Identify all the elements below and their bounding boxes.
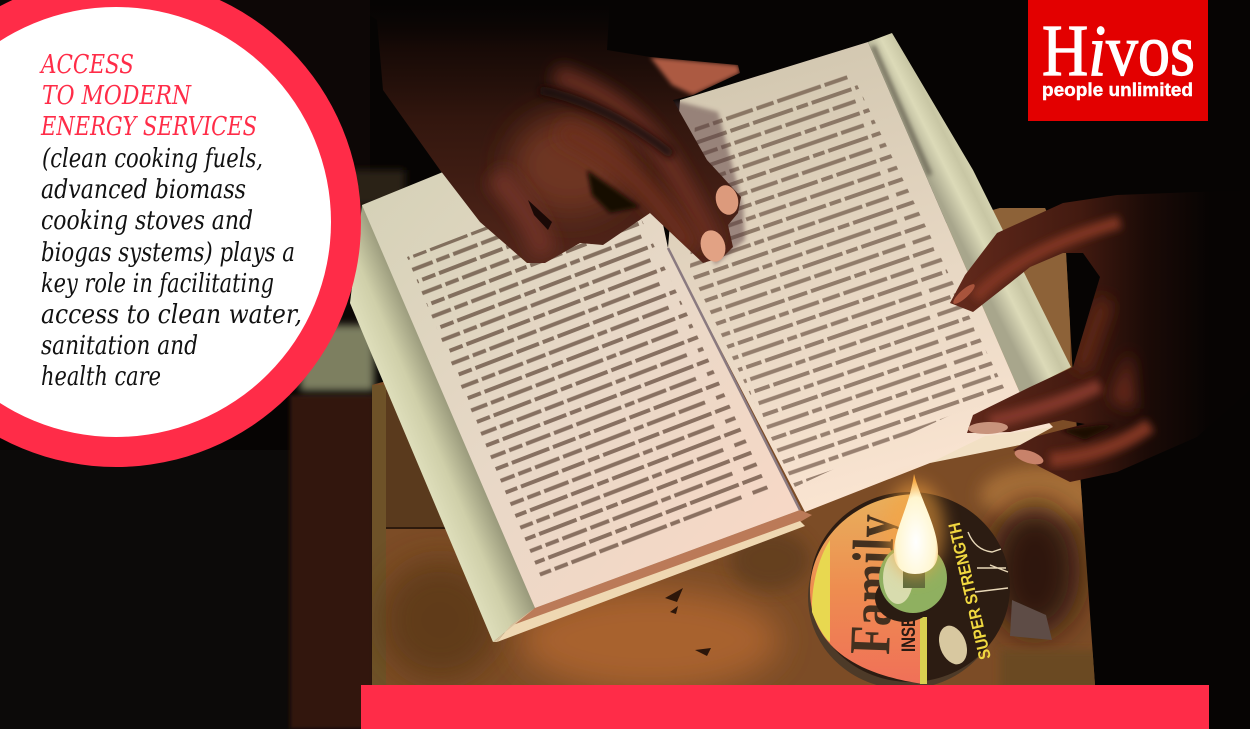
lamp emblem xyxy=(939,626,967,664)
callout heading: ENERGY SERVICES xyxy=(40,112,257,142)
callout body text: access to clean water, xyxy=(41,300,302,330)
wooden table xyxy=(372,208,1102,690)
spine line xyxy=(668,248,800,510)
right page gutter shadow xyxy=(873,46,930,175)
finger gaps xyxy=(587,170,640,213)
callout heading: ACCESS xyxy=(39,50,134,80)
bottom red bar xyxy=(361,685,1209,729)
right page block edge xyxy=(868,33,1071,393)
callout circle xyxy=(0,0,361,467)
left hand xyxy=(378,31,741,263)
Hivos logo: Hivos xyxy=(1042,10,1195,91)
fingernails xyxy=(968,421,1008,435)
open book xyxy=(350,33,1071,642)
table stains xyxy=(665,588,711,656)
lamp burner ring xyxy=(879,543,947,613)
fingernails xyxy=(712,183,742,217)
table grain and light patches xyxy=(372,385,386,685)
finger highlights xyxy=(975,222,1120,298)
flame xyxy=(894,474,938,574)
Hivos logo: people unlimited xyxy=(1042,80,1193,100)
flame glow xyxy=(885,482,945,578)
lamp label text: Family xyxy=(837,513,907,655)
left page text xyxy=(407,175,770,582)
lamp xyxy=(808,474,1052,689)
callout body text: health care xyxy=(41,362,161,392)
callout body text: biogas systems) plays a xyxy=(41,238,295,268)
lamp base rim xyxy=(808,575,982,685)
callout body text: sanitation and xyxy=(41,331,198,361)
callout body text: advanced biomass xyxy=(41,175,246,205)
right page xyxy=(668,42,1053,512)
lamp scratches xyxy=(968,532,1008,592)
hand shadow on page xyxy=(673,100,745,265)
left page block edge xyxy=(350,205,535,642)
lamp burner shadow xyxy=(875,585,924,622)
left page xyxy=(362,115,800,608)
callout body text xyxy=(41,144,302,392)
bottom page block xyxy=(510,510,812,626)
page corner flap xyxy=(930,427,1053,463)
right hand xyxy=(950,192,1188,482)
Hivos logo xyxy=(1028,0,1208,121)
callout body text: key role in facilitating xyxy=(41,269,274,299)
lamp label xyxy=(810,494,923,684)
lamp: SUPER STRENGTH xyxy=(945,521,995,661)
lamp: INSE xyxy=(899,617,920,652)
knuckle highlights xyxy=(510,115,630,215)
callout heading xyxy=(39,50,257,142)
lamp lid dark side xyxy=(810,492,1010,682)
callout body text: cooking stoves and xyxy=(41,206,253,236)
right page text xyxy=(690,70,1005,487)
callout body text: (clean cooking fuels, xyxy=(42,144,263,174)
lamp handle xyxy=(1010,600,1052,640)
callout heading: TO MODERN xyxy=(42,81,192,111)
thumb xyxy=(650,57,740,95)
